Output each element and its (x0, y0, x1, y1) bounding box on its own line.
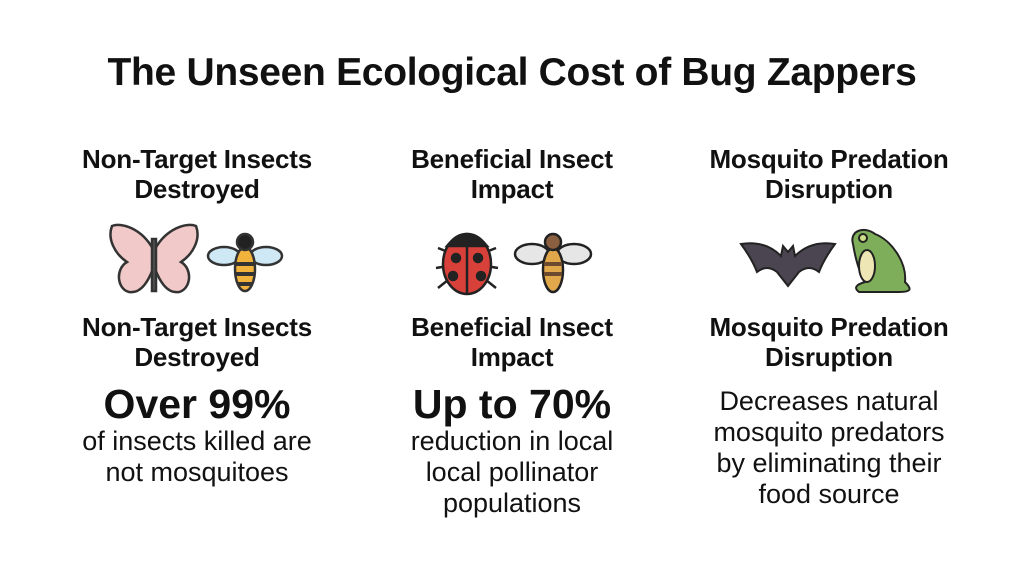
panel: mosquito predation (709, 144, 949, 509)
title: The Unseen Ecological Cost of Bug Zappers (108, 51, 916, 94)
heading: Impact (471, 174, 553, 204)
description: Decreases natural (719, 386, 939, 416)
description: by eliminating their (716, 448, 942, 478)
panel: beneficial insects (411, 144, 613, 518)
heading (411, 144, 613, 204)
subheading: Impact (471, 342, 553, 372)
subheading: Disruption (765, 342, 893, 372)
description: of insects killed are (82, 426, 312, 456)
description: not mosquitoes (105, 457, 289, 487)
description: food source (758, 479, 900, 509)
heading: Destroyed (134, 174, 260, 204)
heading: Non-Target Insects (82, 144, 312, 174)
subheading (709, 312, 949, 372)
icons: ladybug and bee (436, 232, 592, 296)
subheading: Non-Target Insects (82, 312, 312, 342)
icons: butterfly and bee (109, 224, 284, 294)
heading: Disruption (765, 174, 893, 204)
heading (82, 144, 312, 204)
subheading: Mosquito Predation (709, 312, 949, 342)
description: mosquito predators (713, 417, 945, 447)
stat: Up to 70% (413, 381, 611, 427)
subheading: Destroyed (134, 342, 260, 372)
subheading (411, 312, 613, 372)
heading: Mosquito Predation (709, 144, 949, 174)
heading: Beneficial Insect (411, 144, 613, 174)
description: reduction in local (411, 426, 613, 456)
icons: bat and frog (739, 228, 911, 293)
heading (709, 144, 949, 204)
description (411, 426, 613, 518)
description (82, 426, 312, 487)
description (713, 386, 945, 509)
stat: Over 99% (104, 381, 290, 427)
subheading: Beneficial Insect (411, 312, 613, 342)
description: local pollinator (426, 457, 598, 487)
panel: non-target insects (82, 144, 312, 487)
description: populations (443, 488, 581, 518)
subheading (82, 312, 312, 372)
